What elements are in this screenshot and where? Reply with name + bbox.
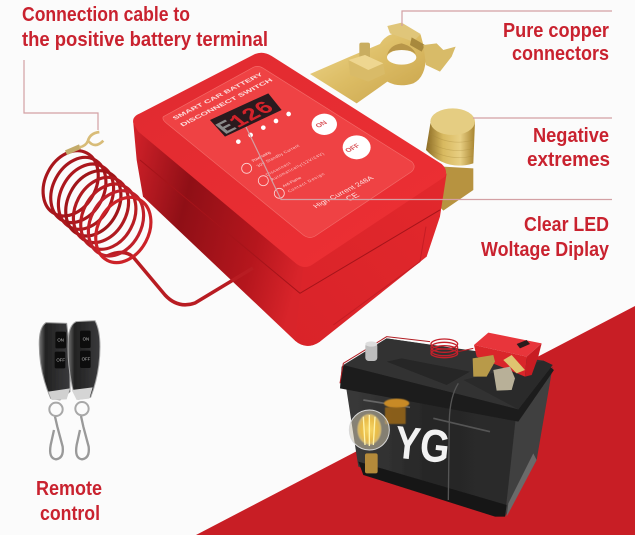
feature list: Automatically(12V/24V) (270, 151, 326, 181)
left fob (39, 323, 70, 459)
background: red diagonal band (196, 306, 635, 535)
left fob: ON (57, 338, 64, 343)
ON button (312, 114, 337, 135)
panel title: SMART CAR BATTERY (172, 72, 265, 121)
left fob: OFF (56, 358, 65, 363)
LED display: E126 (211, 97, 281, 139)
right fob (68, 321, 100, 459)
feature list (242, 143, 326, 198)
cable coil (32, 141, 162, 272)
label: negative extremes: Negative (533, 125, 609, 147)
OFF button: OFF (344, 143, 363, 154)
brand lettering: YG (392, 416, 452, 473)
amber reflection (384, 399, 409, 408)
strap (448, 383, 458, 500)
small coil (431, 339, 458, 358)
label: pure copper connectors: connectors (512, 43, 609, 65)
panel subtitle: DISCONNECT SWITCH (180, 78, 275, 128)
red cable on battery (340, 337, 473, 383)
control panel (163, 66, 414, 237)
feature list: Disconnect (264, 161, 293, 177)
right fob: ON (83, 337, 89, 342)
negative terminal post (426, 108, 475, 211)
label: connection cable (22, 4, 268, 51)
label: connection cable: the positive battery terminal (22, 29, 268, 51)
silver terminal (365, 341, 377, 361)
label: connection cable: Connection cable to (22, 4, 190, 26)
OFF button (343, 135, 371, 159)
label: remote control: control (40, 503, 100, 525)
pure copper connector clamp (310, 23, 456, 103)
leader lines (24, 11, 612, 200)
label: pure copper connectors: Pure copper (503, 20, 609, 42)
fork terminal (66, 132, 103, 153)
feature list: 30V Standby Current (255, 143, 301, 168)
label: remote control: Remote (36, 478, 102, 500)
remote key fobs (39, 321, 100, 459)
feature list: Power saving (250, 150, 272, 163)
ON button: ON (314, 120, 329, 129)
light bulb (349, 410, 389, 473)
label: pure copper connectors (503, 20, 609, 65)
label: negative extremes (527, 125, 610, 171)
battery illustration (340, 333, 554, 517)
coiled cable and lead wire (32, 132, 253, 305)
housing left side (133, 123, 320, 346)
label: clear LED voltage display: Woltage Diplay (481, 239, 610, 261)
current rating: High Current 248A (312, 175, 376, 210)
battery body (345, 367, 553, 517)
label: clear LED voltage display: Clear LED (524, 214, 609, 236)
CE mark: CE (343, 191, 362, 203)
housing right side (295, 173, 447, 346)
feature list: Contact Design (286, 172, 326, 193)
label: remote control (36, 478, 102, 525)
feature list: Anti-Flame (281, 175, 303, 188)
label: negative extremes: extremes (527, 149, 610, 171)
battery lid (340, 338, 554, 422)
mini switch on battery (474, 333, 542, 377)
label: clear LED voltage display (481, 214, 610, 261)
housing top face (133, 53, 446, 267)
mode indicator dots (236, 112, 291, 144)
mini brass connectors (473, 355, 525, 391)
right fob: OFF (82, 357, 91, 362)
switch housing (133, 53, 447, 346)
